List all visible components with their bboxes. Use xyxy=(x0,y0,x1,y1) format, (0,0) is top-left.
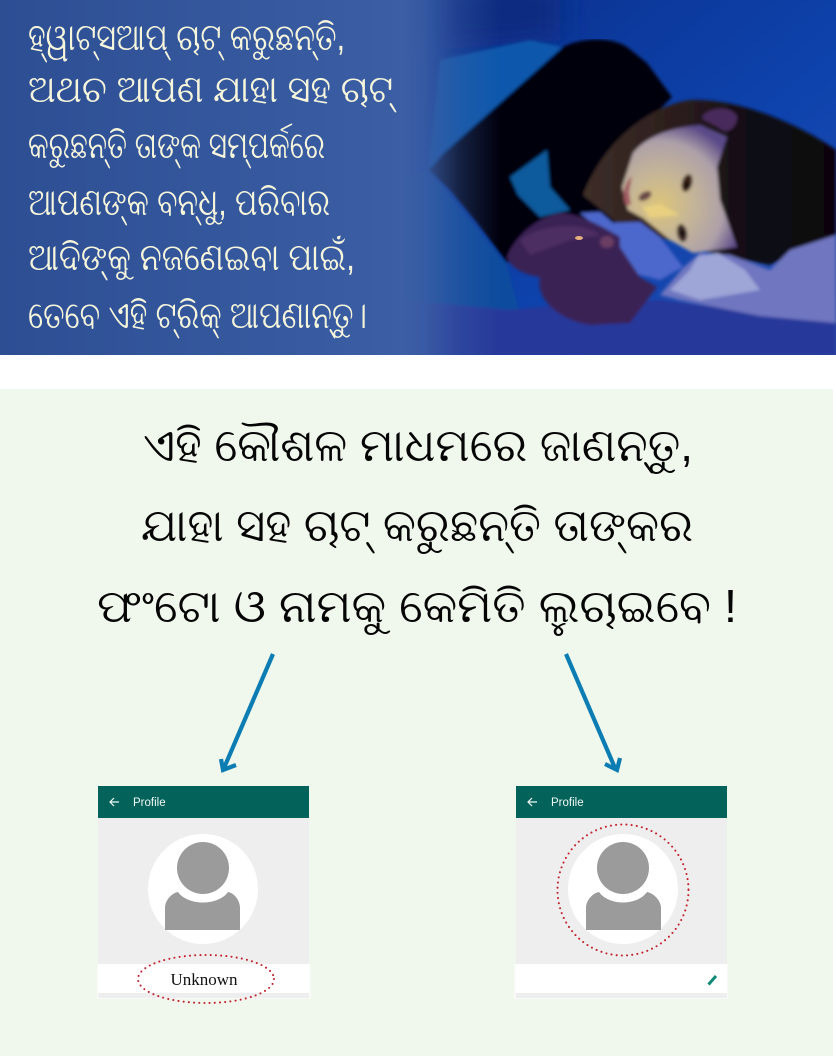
avatar circle xyxy=(148,834,258,944)
panel: right profile screenshot xyxy=(514,786,728,999)
panel: left profile screenshot xyxy=(97,786,311,1003)
heading: main message: ଏହି କୌଶଳ ମାଧମରେ ଜାଣନ୍ତୁ, xyxy=(143,419,693,474)
photo area xyxy=(516,818,727,964)
page background xyxy=(0,389,833,1056)
header label: Profile xyxy=(551,797,584,809)
avatar body xyxy=(165,892,240,930)
avatar circle xyxy=(568,834,678,944)
avatar body xyxy=(586,892,661,930)
heading: hero text: ତେବେ ଏହି ଟ୍ରିକ୍ ଆପଣାନ୍ତୁ। xyxy=(28,295,367,339)
row shadow xyxy=(98,993,309,998)
panel: hero banner xyxy=(0,0,836,356)
arrow: right xyxy=(566,654,620,770)
icon: back arrow xyxy=(110,798,119,806)
heading: hero text xyxy=(28,17,396,339)
blue text panel background xyxy=(0,0,430,355)
icon: back arrow xyxy=(528,798,537,806)
profile header bar xyxy=(516,786,727,818)
heading: main message: ଯାହା ସହ ଚାଟ୍ କରୁଛନ୍ତି ତାଙ୍କର xyxy=(141,499,693,554)
heading: hero text: ଅଥଚ ଆପଣ ଯାହା ସହ ଚାଟ୍ xyxy=(28,69,396,112)
row shadow xyxy=(516,993,727,998)
heading: main message xyxy=(97,419,737,636)
avatar head xyxy=(177,842,229,894)
card shadow base xyxy=(97,964,311,999)
icon: pencil xyxy=(708,976,716,984)
heading: hero text: ହ୍ୱାଟ୍ସଆପ୍ ଚାଟ୍ କରୁଛନ୍ତି, xyxy=(28,17,345,62)
heading: hero text: ଆଦିଙ୍କୁ ନଜଣେଇବା ପାଇଁ, xyxy=(28,236,355,281)
avatar head xyxy=(597,842,649,894)
name row xyxy=(98,964,309,993)
arrow: left xyxy=(221,654,273,770)
photo: girl looking at phone in bed xyxy=(400,0,836,356)
photo area xyxy=(98,818,309,964)
heading: hero text: କରୁଛନ୍ତି ତାଙ୍କ ସମ୍ପର୍କରେ xyxy=(28,123,325,169)
heading: main message: ଫଂଟୋ ଓ ନାମକୁ କେମିତି ଲୁଚାଇବେ ! xyxy=(97,580,737,636)
card shadow base xyxy=(514,964,728,999)
dotted highlight circle xyxy=(558,824,688,956)
profile header bar xyxy=(98,786,309,818)
header label: Profile xyxy=(133,797,166,809)
dotted highlight ellipse xyxy=(138,955,274,1003)
heading: hero text: ଆପଣଙ୍କ ବନ୍ଧୁ, ପରିବାର xyxy=(28,182,330,226)
name: Unknown: Unknown xyxy=(170,970,238,989)
name row xyxy=(516,964,727,993)
